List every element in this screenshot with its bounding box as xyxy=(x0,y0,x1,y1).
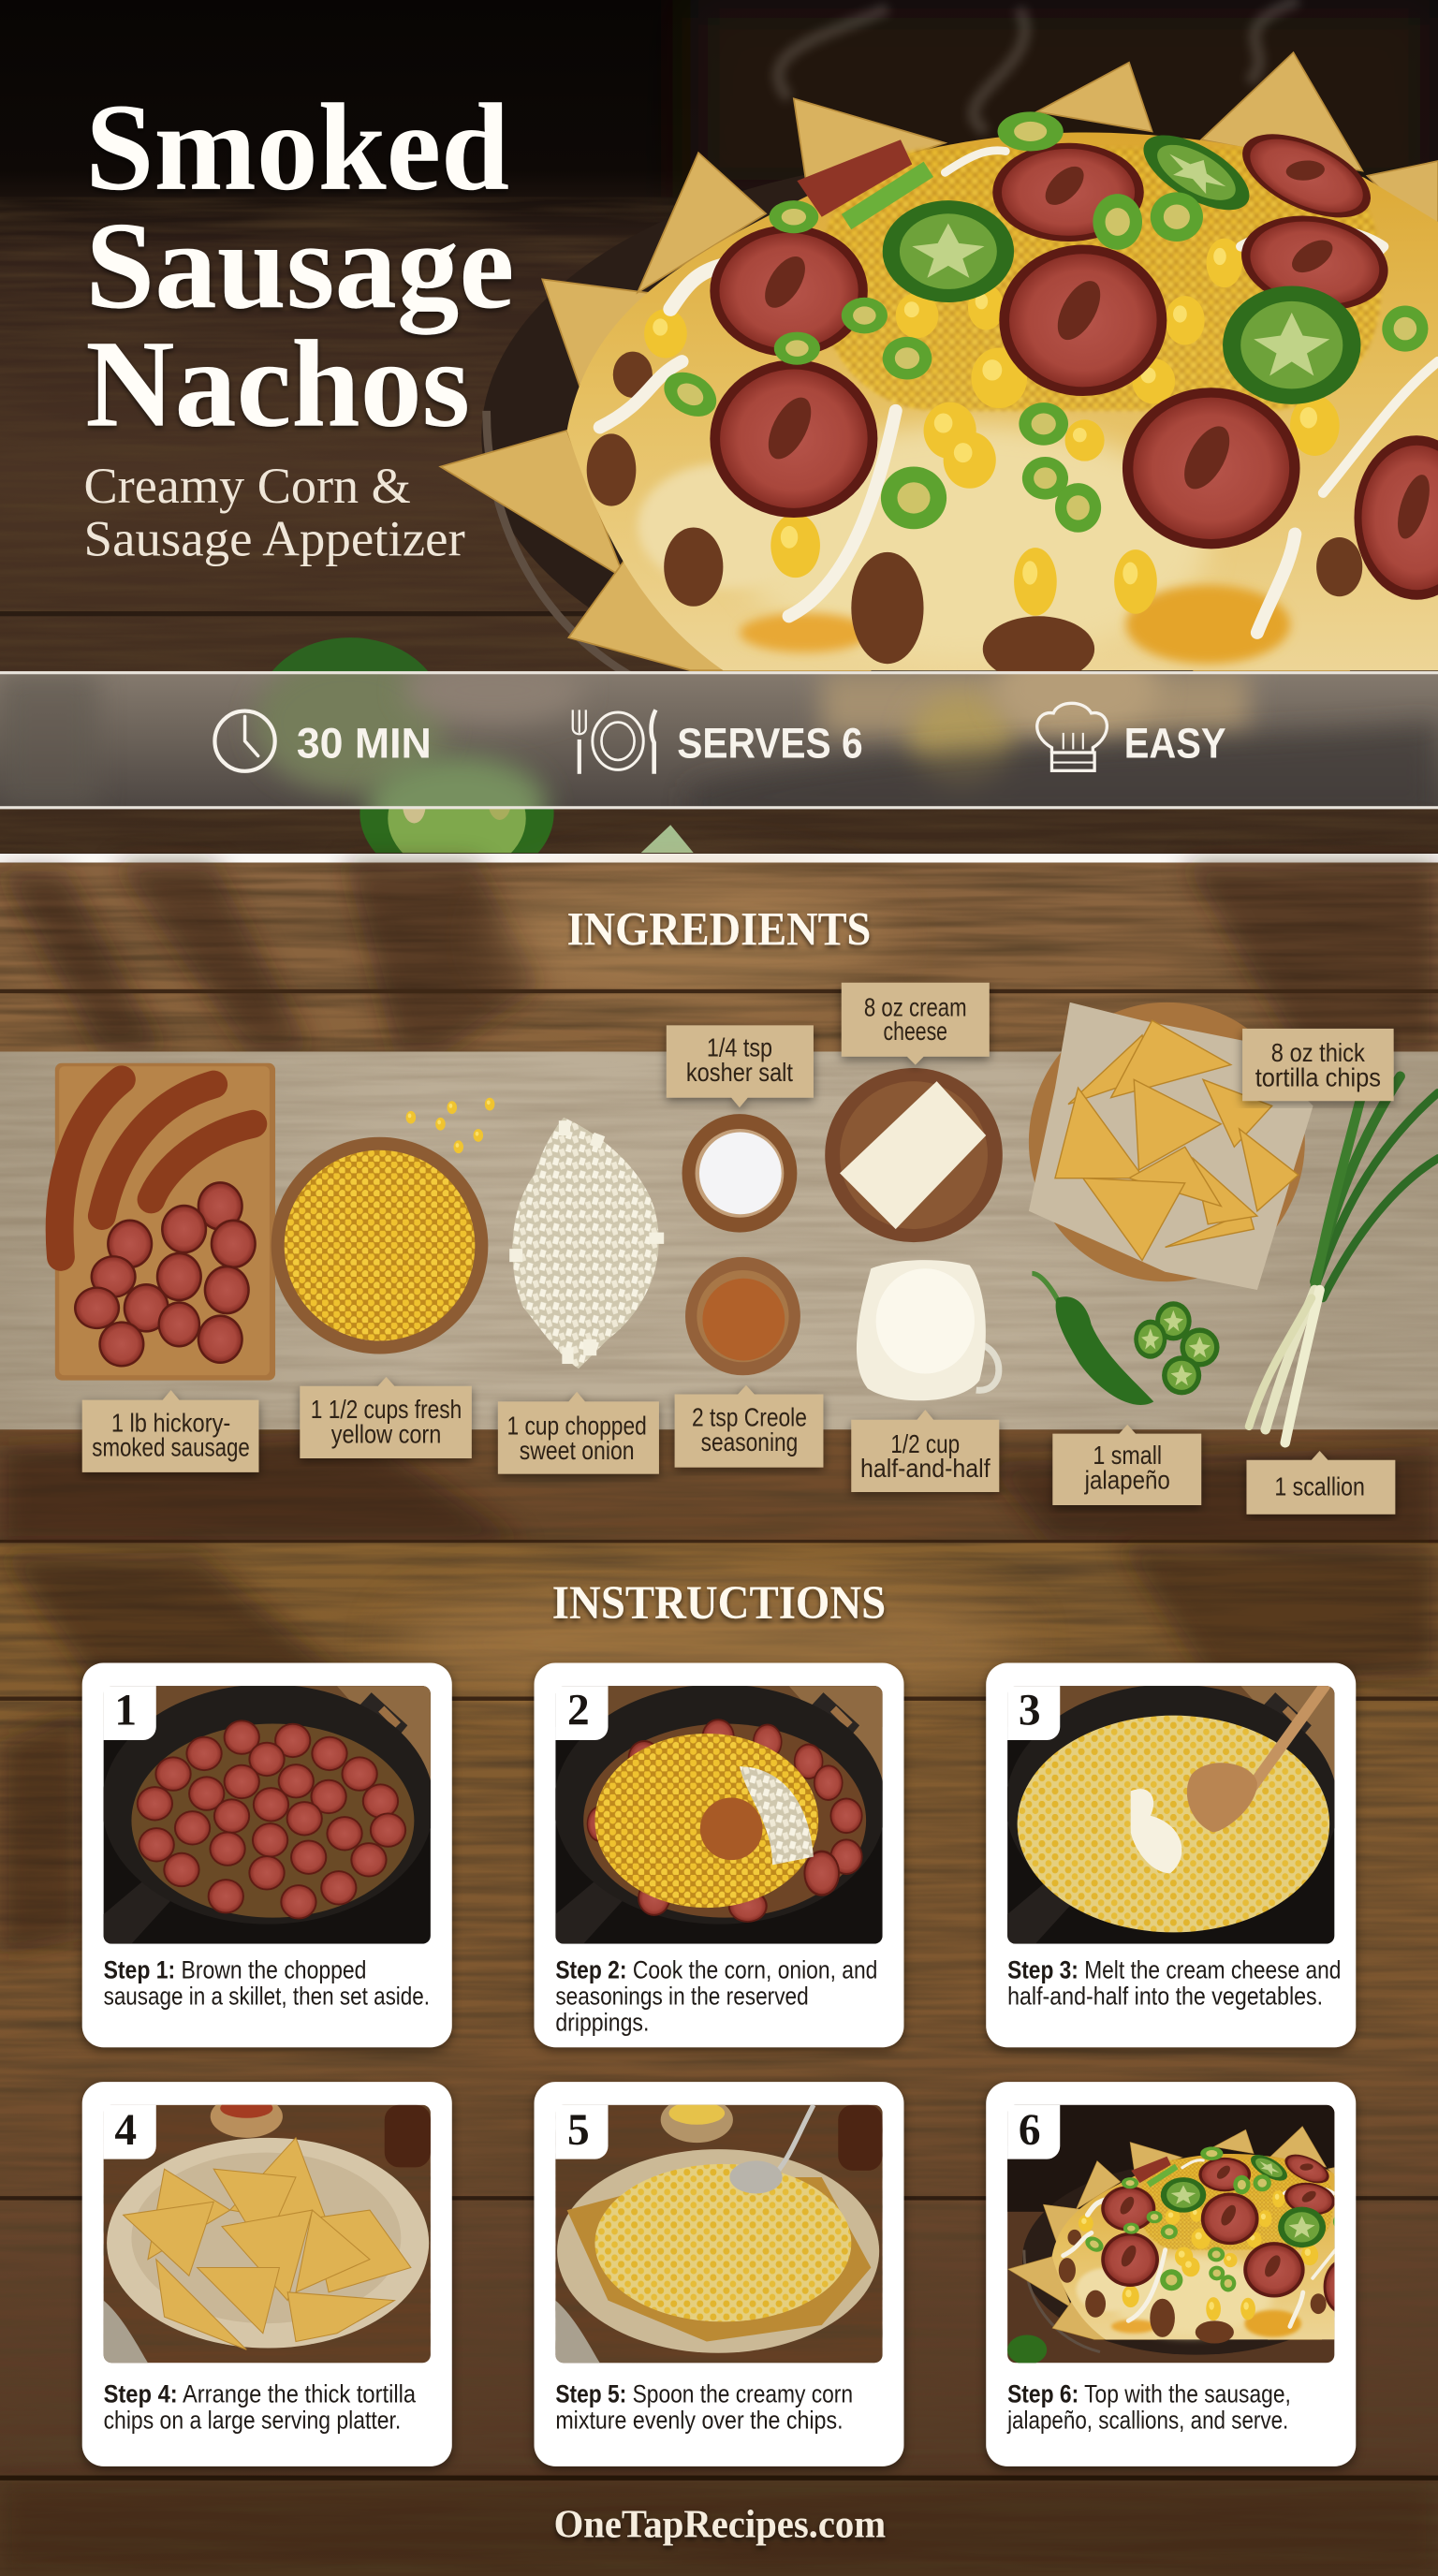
label: tortilla chips xyxy=(1242,1029,1394,1101)
step text: chips on a large serving platter. xyxy=(104,2406,401,2435)
step number badge: 1 xyxy=(114,1686,137,1734)
photo: corn onion and seasoning in skillet xyxy=(554,1684,886,1944)
title: Nachos xyxy=(85,315,470,453)
label: scallion xyxy=(1246,1451,1395,1515)
step number badge xyxy=(555,1686,609,1740)
label: kosher salt: kosher salt xyxy=(686,1058,793,1087)
stat: difficulty: EASY xyxy=(1124,719,1226,767)
ingredient: corn bowl xyxy=(271,1098,494,1354)
step number badge xyxy=(104,1686,156,1740)
ingredient: half-and-half pitcher xyxy=(857,1260,999,1400)
title: Smoked xyxy=(85,78,509,216)
label: cream cheese: cheese xyxy=(884,1017,947,1046)
ingredient: cream cheese xyxy=(825,1068,1003,1242)
label: half-and-half xyxy=(851,1410,999,1492)
label: cream cheese: 8 oz cream xyxy=(864,993,967,1022)
card: step 2 xyxy=(535,1663,903,2047)
step text: seasonings in the reserved xyxy=(555,1982,809,2011)
corn kernels xyxy=(644,239,1340,616)
step number badge: 6 xyxy=(1019,2106,1041,2155)
step number badge xyxy=(104,2105,156,2159)
ingredient: tortilla chips xyxy=(1029,1003,1313,1290)
label: creole seasoning xyxy=(675,1385,823,1468)
icon: blurred steam xyxy=(778,0,1299,131)
ingredient: jalapeno xyxy=(1032,1273,1220,1405)
label: half-and-half: 1/2 cup xyxy=(890,1429,960,1458)
title: Sausage xyxy=(85,196,514,335)
panel: instructions xyxy=(0,1543,1438,2576)
card: step 5 xyxy=(535,2082,903,2466)
step text: Step 1: Brown the chopped xyxy=(104,1955,366,1984)
step number badge xyxy=(1007,1686,1060,1740)
label: onion: sweet onion xyxy=(520,1436,635,1465)
label: sausage: smoked sausage xyxy=(92,1432,250,1461)
photo: finished nachos xyxy=(1007,2105,1371,2364)
subtitle xyxy=(84,458,465,566)
label: jalapeno: jalapeño xyxy=(1084,1465,1170,1494)
drizzle xyxy=(600,151,1438,633)
photo: creamy corn in skillet with spoon xyxy=(1005,1684,1338,1944)
step number badge xyxy=(1007,2105,1060,2159)
bowl xyxy=(481,156,1438,715)
step text: sausage in a skillet, then set aside. xyxy=(104,1982,430,2011)
panel: info strip xyxy=(0,644,1438,855)
step text xyxy=(1006,2378,1291,2435)
linen runner xyxy=(0,1051,1438,1429)
corn topping xyxy=(822,148,1381,411)
panel: hero xyxy=(0,0,1438,886)
photo: browned sausage in skillet xyxy=(102,1684,433,1944)
green onion pieces xyxy=(656,111,1428,533)
label: creole seasoning: 2 tsp Creole xyxy=(692,1403,807,1432)
step text: Step 6: Top with the sausage, xyxy=(1007,2378,1291,2408)
subtitle: Sausage Appetizer xyxy=(84,510,465,566)
chips xyxy=(440,52,1438,670)
step number badge: 2 xyxy=(567,1686,590,1734)
step text: half-and-half into the vegetables. xyxy=(1007,1982,1323,2011)
heading: ingredients: INGREDIENTS xyxy=(567,903,871,956)
label: tortilla chips: tortilla chips xyxy=(1255,1062,1381,1091)
card: step 6 xyxy=(986,2082,1371,2466)
icon: chef hat xyxy=(1037,703,1107,770)
label: kosher salt xyxy=(667,1025,814,1107)
title xyxy=(85,78,514,453)
ingredient: chopped onion xyxy=(509,1118,664,1368)
photo: chips on platter xyxy=(104,2095,431,2363)
label: onion xyxy=(498,1392,659,1474)
sausage slices xyxy=(710,117,1438,600)
ingredient: creole seasoning xyxy=(685,1257,800,1375)
label: corn xyxy=(300,1377,472,1458)
label: corn: 1 1/2 cups fresh xyxy=(311,1395,462,1424)
step text: Step 3: Melt the cream cheese and xyxy=(1007,1955,1341,1984)
melted cheese xyxy=(567,133,1438,670)
label: kosher salt: 1/4 tsp xyxy=(707,1033,772,1062)
label: cream cheese xyxy=(842,983,990,1065)
label: tortilla chips: 8 oz thick xyxy=(1271,1038,1366,1067)
step text: Step 5: Spoon the creamy corn xyxy=(555,2378,853,2408)
label: creole seasoning: seasoning xyxy=(701,1427,798,1456)
meat xyxy=(587,352,1362,682)
ingredient: sausage on board xyxy=(55,1063,275,1381)
card: step 1 xyxy=(82,1663,452,2047)
light and shadow on table xyxy=(0,863,1438,1544)
step number badge: 4 xyxy=(114,2106,137,2155)
step text xyxy=(104,1955,430,2011)
stat: servings: SERVES 6 xyxy=(677,719,863,767)
card: step 3 xyxy=(986,1663,1356,2047)
photo: corn mixture over chips xyxy=(555,2097,883,2363)
step text: Step 2: Cook the corn, onion, and xyxy=(555,1955,877,1984)
footer: website: OneTapRecipes.com xyxy=(554,2502,886,2546)
icon: clock xyxy=(214,711,275,771)
step text: drippings. xyxy=(555,2008,649,2037)
stat: time: 30 MIN xyxy=(297,719,432,767)
icon: jalapeno slice below strip xyxy=(360,809,554,854)
illustration: nachos xyxy=(440,52,1438,715)
step number badge: 3 xyxy=(1019,1686,1041,1734)
label: sausage xyxy=(82,1390,258,1472)
icon: scallion piece xyxy=(641,825,694,853)
jalapeno rings xyxy=(883,120,1360,404)
step text xyxy=(1007,1955,1341,2011)
subtitle: Creamy Corn & xyxy=(84,458,411,514)
panel: ingredients xyxy=(0,863,1438,1544)
label: half-and-half: half-and-half xyxy=(860,1454,990,1483)
icon: jalapeno slice above strip xyxy=(272,637,428,672)
step text: jalapeño, scallions, and serve. xyxy=(1006,2406,1288,2435)
step number badge xyxy=(555,2105,609,2159)
step text xyxy=(104,2378,417,2435)
step number badge: 5 xyxy=(567,2106,590,2155)
label: sausage: 1 lb hickory- xyxy=(111,1409,230,1438)
ingredient: scallions xyxy=(1249,1076,1438,1442)
label: jalapeno xyxy=(1052,1425,1201,1505)
label: jalapeno: 1 small xyxy=(1093,1441,1162,1470)
step text xyxy=(555,2378,853,2435)
label: corn: yellow corn xyxy=(331,1419,441,1448)
step text xyxy=(555,1955,877,2037)
label: scallion: 1 scallion xyxy=(1274,1471,1365,1500)
step text: mixture evenly over the chips. xyxy=(555,2406,844,2435)
heading: instructions: INSTRUCTIONS xyxy=(552,1577,886,1630)
icon: plate and cutlery xyxy=(573,710,655,774)
ingredient: kosher salt xyxy=(682,1114,797,1233)
step text: Step 4: Arrange the thick tortilla xyxy=(104,2378,417,2408)
card: step 4 xyxy=(82,2082,452,2466)
label: onion: 1 cup chopped xyxy=(507,1411,647,1440)
